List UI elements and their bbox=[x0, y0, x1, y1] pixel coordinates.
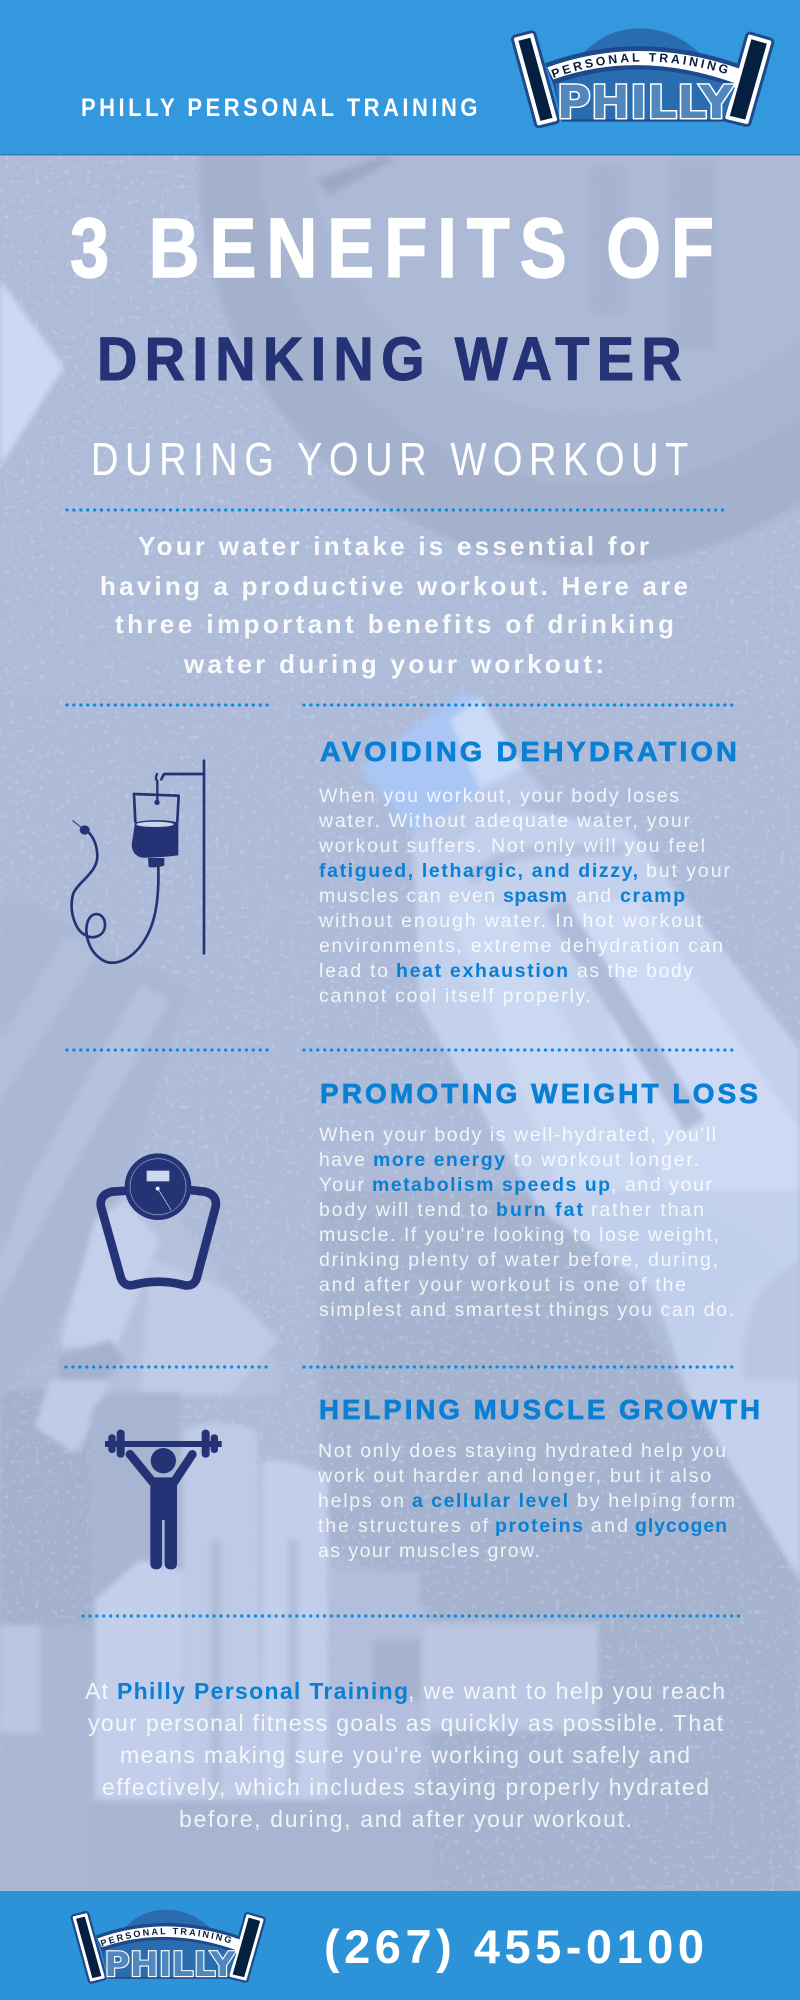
phone number: (267) 455-0100 bbox=[324, 1920, 707, 1973]
icon: bathroom scale bbox=[101, 1153, 216, 1285]
bottle bbox=[413, 800, 800, 1580]
section 2 body: drinking plenty of water before, during, bbox=[319, 1249, 718, 1271]
chrome dumbbell bbox=[35, 1380, 110, 1452]
section 2 body: burn fat bbox=[496, 1199, 584, 1221]
section 3 body: glycogen bbox=[635, 1515, 727, 1537]
weight plate top bbox=[200, 0, 800, 565]
logo: header: PERSONAL TRAINING bbox=[551, 53, 728, 78]
logo: header bbox=[511, 28, 774, 129]
closing paragraph: At bbox=[85, 1678, 109, 1704]
section 3 body: by helping form bbox=[577, 1490, 735, 1512]
closing paragraph: your personal fitness goals as quickly as possible. That bbox=[88, 1710, 724, 1736]
section 3 body: a cellular level bbox=[412, 1490, 568, 1512]
section 3 heading: HELPING MUSCLE GROWTH bbox=[319, 1394, 763, 1425]
section 2 body: Your bbox=[319, 1174, 364, 1196]
section 2 body: body will tend to bbox=[319, 1199, 488, 1221]
chrome weight stack bbox=[60, 1175, 280, 1395]
closing paragraph bbox=[85, 1678, 725, 1832]
brand name: PHILLY PERSONAL TRAINING bbox=[81, 94, 481, 122]
intro text: having a productive workout. Here are bbox=[100, 571, 688, 601]
section 2 body: have bbox=[319, 1149, 365, 1171]
section 3 body: and bbox=[591, 1515, 628, 1537]
closing paragraph: means making sure you're working out safely and bbox=[120, 1742, 690, 1768]
section 3 body: as your muscles grow. bbox=[318, 1540, 540, 1562]
section 1 body bbox=[318, 785, 730, 1007]
section 1 heading: AVOIDING DEHYDRATION bbox=[320, 736, 740, 767]
section 3 body: Not only does staying hydrated help you bbox=[318, 1440, 726, 1462]
section 2 heading: PROMOTING WEIGHT LOSS bbox=[320, 1078, 761, 1109]
section 1 body: lead to bbox=[319, 960, 388, 982]
section 2 body: more energy bbox=[373, 1149, 505, 1171]
section 3 body: proteins bbox=[495, 1515, 583, 1537]
intro text: water during your workout: bbox=[183, 649, 604, 679]
footer bar bbox=[0, 1891, 800, 2000]
intro text: Your water intake is essential for bbox=[138, 531, 649, 561]
closing paragraph: Philly Personal Training bbox=[117, 1678, 408, 1704]
section 2 body: muscle. If you're looking to lose weight, bbox=[319, 1224, 719, 1246]
section 2 body: to workout longer. bbox=[514, 1149, 699, 1171]
logo: footer: PHILLY bbox=[104, 1945, 236, 1984]
section 3 body: the structures of bbox=[318, 1515, 489, 1537]
logo: footer bbox=[70, 1910, 266, 1984]
logo: header: PHILLY bbox=[557, 76, 734, 129]
section 1 body: heat exhaustion bbox=[396, 960, 568, 982]
intro text bbox=[100, 531, 688, 679]
intro text: three important benefits of drinking bbox=[115, 609, 674, 639]
section 1 body: but your bbox=[646, 860, 730, 882]
header bar bbox=[0, 0, 800, 156]
section 1 body: and bbox=[576, 885, 611, 907]
title: drinking water: DRINKING WATER bbox=[97, 325, 689, 393]
section 1 body: as the body bbox=[577, 960, 693, 982]
section 3 body: work out harder and longer, but it also bbox=[317, 1465, 711, 1487]
section 1 body: fatigued, lethargic, and dizzy, bbox=[319, 860, 638, 882]
section 1 body: without enough water. In hot workout bbox=[318, 910, 703, 932]
closing paragraph: , we want to help you reach bbox=[408, 1678, 725, 1704]
icon: IV drip bag bbox=[72, 761, 204, 963]
section 1 body: muscles can even bbox=[319, 885, 495, 907]
section 2 body: , and your bbox=[611, 1174, 712, 1196]
section 2 body: metabolism speeds up bbox=[372, 1174, 610, 1196]
dumbbell plates left bbox=[0, 901, 188, 1400]
icon: weightlifter bbox=[105, 1430, 222, 1569]
section 1 body: water. Without adequate water, your bbox=[318, 810, 690, 832]
section 2 body: When your body is well-hydrated, you'll bbox=[319, 1124, 716, 1146]
closing paragraph: before, during, and after your workout. bbox=[179, 1806, 632, 1832]
section 2 body: rather than bbox=[591, 1199, 704, 1221]
section 3 body: helps on bbox=[318, 1490, 404, 1512]
section 1 body: workout suffers. Not only will you feel bbox=[318, 835, 705, 857]
section 2 body bbox=[319, 1124, 734, 1321]
section 1 body: spasm bbox=[503, 885, 567, 907]
closing paragraph: effectively, which includes staying properly hydrated bbox=[102, 1774, 709, 1800]
section 3 body bbox=[317, 1440, 735, 1562]
section 1 body: environments, extreme dehydration can bbox=[319, 935, 723, 957]
section 2 body: and after your workout is one of the bbox=[319, 1274, 686, 1296]
section 1 body: When you workout, your body loses bbox=[319, 785, 679, 807]
section 1 body: cannot cool itself properly. bbox=[319, 985, 591, 1007]
section 2 body: simplest and smartest things you can do. bbox=[319, 1299, 734, 1321]
section 1 body: cramp bbox=[620, 885, 685, 907]
logo: footer: PERSONAL TRAINING bbox=[100, 1928, 232, 1946]
